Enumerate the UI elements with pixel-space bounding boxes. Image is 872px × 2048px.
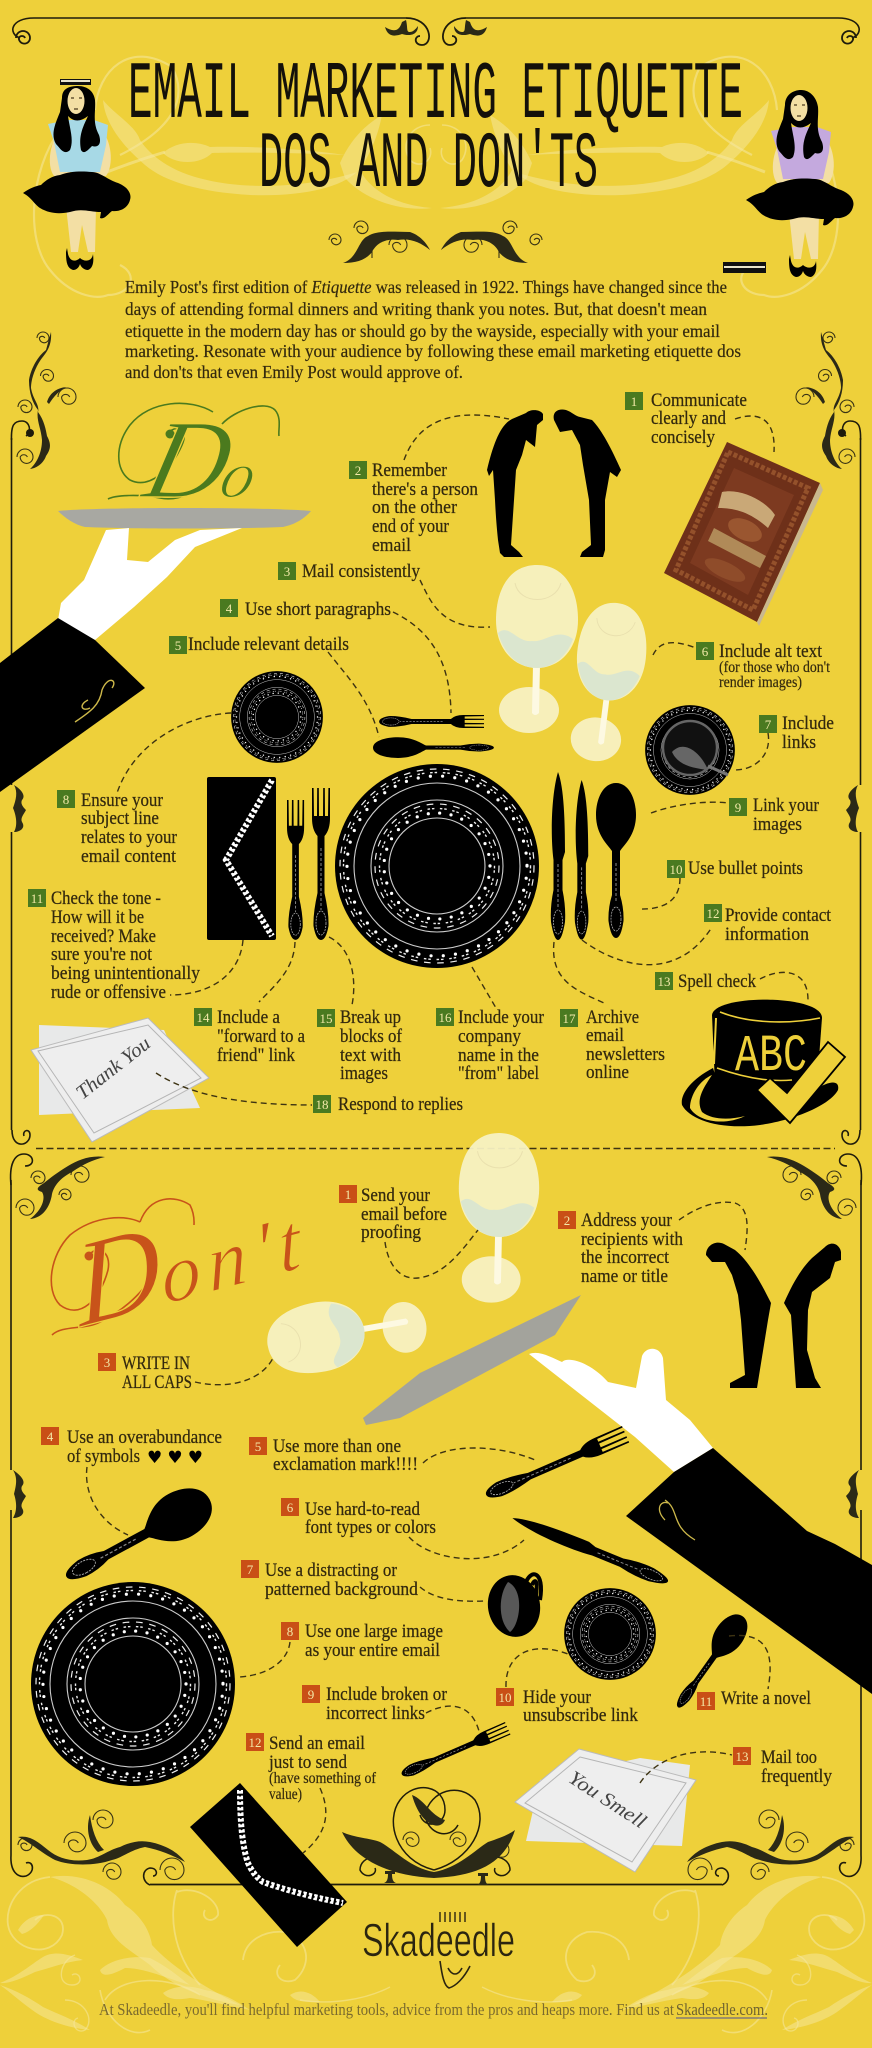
do section border ornaments [11, 332, 861, 1144]
illustration: forks [287, 788, 330, 940]
item do 16: Include your [458, 1008, 544, 1028]
item do 8: email content [81, 847, 177, 867]
illustration: open gloved hand [529, 1349, 713, 1472]
item do 1: Communicate [651, 391, 747, 411]
item do 14 [194, 1008, 305, 1066]
item do 6: render images) [719, 674, 802, 691]
item do 2: email [372, 536, 411, 556]
illustration: woman with book on head [23, 79, 130, 270]
item do 6: (for those who don't [719, 659, 831, 676]
illustration: knives and spoon [551, 772, 636, 940]
heading: Do: Do [132, 398, 275, 522]
item don't 9: 9 [308, 1687, 314, 1702]
logo: Skadeedle: Skadeedle [362, 1914, 515, 1966]
item do 15: 15 [320, 1011, 332, 1026]
title [128, 49, 743, 211]
item do 9 [729, 796, 819, 835]
item do 14: friend" link [217, 1046, 296, 1066]
item don't 6: 6 [287, 1500, 294, 1515]
item do 15 [317, 1008, 403, 1084]
illustration: main plate [335, 764, 539, 968]
item don't 5: Use more than one [273, 1437, 401, 1457]
item don't 3 [98, 1353, 192, 1393]
item do 7 [759, 714, 834, 753]
intro text [125, 277, 741, 382]
item don't 2: recipients with [581, 1230, 683, 1250]
item don't 11: 11 [700, 1694, 712, 1709]
item do 14: Include a [217, 1008, 280, 1028]
item do 8: subject line [81, 809, 159, 829]
item don't 4: 4 [47, 1429, 54, 1444]
item don't 3: ALL CAPS [122, 1373, 192, 1393]
intro text: days of attending formal dinners and writing thank you notes. But, that doesn't mean [125, 299, 707, 319]
item don't 10 [496, 1688, 639, 1726]
footer text: At Skadeedle, you'll find helpful marketing tools, advice from the pros and heaps more. Find us at [99, 2000, 674, 2019]
item do 9: 9 [735, 800, 741, 815]
item don't 8: 8 [287, 1624, 293, 1639]
item don't 9 [302, 1685, 447, 1724]
item do 8 [57, 790, 177, 867]
item don't 6: Use hard-to-read [305, 1500, 421, 1520]
panel: don't section [11, 1133, 872, 1947]
item do 6: 6 [702, 644, 709, 659]
background swirls: footer [0, 1876, 872, 2033]
connectors: don't section [87, 1202, 770, 1853]
item do 3: 3 [284, 564, 290, 579]
illustration: woman with fallen book [746, 90, 854, 277]
item do 11: received? Make [51, 927, 156, 947]
item do 5: Include relevant details [188, 635, 349, 655]
item don't 10: unsubscribe link [523, 1706, 639, 1726]
item don't 6: font types or colors [305, 1518, 436, 1538]
item don't 1: email before [361, 1205, 447, 1225]
item do 2 [349, 461, 478, 556]
item don't 5: 5 [255, 1439, 261, 1454]
illustration: apologetic couple [706, 1243, 841, 1388]
item don't 3: 3 [104, 1355, 110, 1370]
item don't 13: 13 [736, 1749, 748, 1764]
section divider [36, 1148, 835, 1150]
item do 4: 4 [226, 601, 233, 616]
illustration: gloved hand with tray [58, 528, 242, 640]
item do 15: blocks of [340, 1027, 403, 1047]
item do 11: rude or offensive [51, 983, 166, 1003]
illustration: napkin [207, 777, 276, 940]
illustration: cutlery horizontal [373, 715, 494, 758]
item don't 8 [281, 1622, 443, 1661]
item don't 13: Mail too [761, 1748, 817, 1768]
item do 11: being unintentionally [51, 964, 201, 984]
item don't 13 [733, 1747, 833, 1787]
don't section border ornaments [11, 1154, 861, 1885]
illustration: fork [483, 1426, 629, 1503]
item don't 4: ♥♥♥ [147, 1448, 203, 1468]
item do 17: Archive [586, 1008, 639, 1028]
illustration: top hat with check: ABC [735, 1027, 807, 1086]
heading: Don't: Don't [69, 1158, 312, 1355]
item do 2: 2 [355, 463, 361, 478]
item don't 4 [41, 1427, 222, 1468]
item do 7: Include [782, 714, 834, 734]
item don't 12: (have something of [269, 1770, 377, 1787]
illustration: etiquette book [664, 442, 823, 626]
item do 2: there's a person [372, 480, 478, 500]
item do 16 [436, 1008, 544, 1084]
illustration: large plate [31, 1582, 235, 1786]
illustration: mug [483, 1571, 545, 1641]
item do 11 [28, 889, 201, 1003]
center flourish [329, 221, 542, 263]
item don't 12: value) [269, 1786, 302, 1803]
item don't 8: Use one large image [305, 1622, 443, 1642]
item do 8: relates to your [81, 828, 177, 848]
item don't 12: 12 [248, 1735, 262, 1750]
item do 4: Use short paragraphs [245, 600, 391, 620]
illustration: fallen wine glasses [261, 1133, 539, 1381]
item do 12: Provide contact [725, 906, 832, 926]
item don't 12: Send an email [269, 1734, 365, 1754]
item do 14: 14 [196, 1010, 210, 1025]
item don't 11 [697, 1689, 811, 1710]
item do 1: clearly and [651, 409, 727, 429]
illustration: thank you card: Thank You [72, 1033, 155, 1104]
illustration: top hat with check [682, 1000, 845, 1126]
item do 18: 18 [316, 1097, 328, 1112]
item don't 7 [241, 1560, 419, 1600]
item don't 2: Address your [581, 1211, 672, 1231]
illustration: center flourish [342, 1788, 515, 1885]
item don't 1: proofing [361, 1223, 421, 1243]
item don't 3: WRITE IN [122, 1354, 190, 1374]
item do 6: Include alt text [719, 642, 823, 662]
item don't 4: Use an overabundance [67, 1428, 222, 1448]
item don't 9: incorrect links [326, 1704, 425, 1724]
item don't 2: name or title [581, 1267, 668, 1287]
illustration: tray [58, 508, 311, 528]
item do 1 [625, 391, 747, 448]
item don't 10: 10 [498, 1690, 512, 1705]
item do 1: 1 [631, 394, 637, 409]
item don't 1: 1 [345, 1187, 351, 1202]
illustration: you smell card: You Smell [564, 1767, 651, 1833]
intro text: and don'ts that even Emily Post would approve of. [125, 362, 463, 382]
illustration: knife [510, 1511, 671, 1588]
item do 11: sure you're not [51, 945, 153, 965]
item don't 1: Send your [361, 1186, 430, 1206]
item don't 2: 2 [564, 1213, 570, 1228]
item don't 5 [249, 1437, 418, 1475]
item don't 2 [558, 1211, 683, 1287]
intro text: Emily Post's first edition of Etiquette was released in 1922. Things have changed since the [125, 277, 727, 297]
item don't 7: Use a distracting or [265, 1561, 397, 1581]
item do 11: Check the tone - [51, 889, 161, 909]
item do 17: email [586, 1026, 624, 1046]
illustration: small plate [231, 671, 323, 763]
item do 12: 12 [706, 906, 720, 921]
item do 5: 5 [175, 638, 181, 653]
item don't 7: patterned background [265, 1580, 419, 1600]
illustration: fork small [399, 1722, 510, 1781]
item do 7: links [782, 733, 816, 753]
illustration: wine glasses [496, 565, 651, 765]
illustration: tilted tray [363, 1295, 581, 1425]
item do 11: 11 [31, 891, 43, 906]
item do 17: online [586, 1063, 629, 1083]
item do 1: concisely [651, 428, 716, 448]
item do 8: Ensure your [81, 791, 163, 811]
item don't 10: Hide your [523, 1688, 591, 1708]
footer text: Skadeedle.com. [676, 2000, 768, 2019]
item do 2: Remember [372, 461, 447, 481]
item do 13: 13 [658, 974, 670, 989]
item don't 4: of symbols [67, 1447, 140, 1467]
illustration: sleeve [626, 1448, 872, 1694]
illustration: sleeve [0, 618, 145, 792]
item do 16: name in the [458, 1046, 539, 1066]
illustration: spoon [55, 1478, 221, 1598]
panel: do section [0, 332, 861, 1144]
item don't 13: frequently [761, 1767, 833, 1787]
illustration: spoon small [666, 1608, 754, 1716]
illustration: napkin tilted [190, 1783, 347, 1947]
item do 15: Break up [340, 1008, 401, 1028]
intro text: marketing. Resonate with your audience by following these email marketing etiquette dos [125, 341, 741, 361]
item do 11: How will it be [51, 908, 144, 928]
item do 14: "forward to a [217, 1027, 305, 1047]
item do 9: Link your [753, 796, 819, 816]
intro text: etiquette in the modern day has or should go by the wayside, especially with your email [125, 321, 720, 341]
icon: fallen book [723, 262, 766, 273]
item don't 8: as your entire email [305, 1641, 440, 1661]
item do 17 [560, 1008, 665, 1083]
item don't 1 [339, 1185, 447, 1243]
item do 10: 10 [670, 862, 682, 877]
illustration: thank you card [31, 1018, 209, 1142]
item do 17: 17 [562, 1011, 576, 1026]
item don't 12 [246, 1733, 377, 1803]
illustration: you smell card [515, 1749, 696, 1872]
item do 12 [704, 904, 832, 945]
item don't 9: Include broken or [326, 1685, 447, 1705]
item do 8: 8 [63, 792, 69, 807]
item don't 6 [281, 1498, 436, 1538]
item do 17: newsletters [586, 1045, 665, 1065]
background swirls: header [34, 57, 838, 297]
item do 16: "from" label [458, 1064, 539, 1084]
item do 3: Mail consistently [302, 562, 421, 582]
item do 13: Spell check [678, 972, 757, 992]
item do 16: 16 [438, 1010, 452, 1025]
illustration: bowing couple [487, 409, 621, 557]
item do 15: images [340, 1064, 388, 1084]
connectors: do section [117, 415, 808, 1105]
item do 6 [696, 642, 831, 691]
illustration: coffee cup on plate [645, 705, 735, 795]
item don't 11: Write a novel [721, 1689, 811, 1709]
item don't 7: 7 [247, 1562, 254, 1577]
illustration: small plate [564, 1588, 656, 1680]
item do 15: text with [340, 1046, 401, 1066]
item do 10: Use bullet points [688, 859, 803, 879]
item do 16: company [458, 1027, 522, 1047]
item do 9: images [753, 815, 802, 835]
item don't 5: exclamation mark!!!! [273, 1455, 418, 1475]
item do 7: 7 [765, 717, 772, 732]
logo: Skadeedle [362, 1912, 515, 1988]
item don't 12: just to send [268, 1753, 348, 1773]
item don't 2: the incorrect [581, 1248, 670, 1268]
top ornamental border [13, 18, 859, 45]
item do 2: on the other [372, 498, 457, 518]
item do 12: information [725, 925, 809, 945]
item do 2: end of your [372, 517, 449, 537]
item do 18: Respond to replies [338, 1095, 463, 1115]
